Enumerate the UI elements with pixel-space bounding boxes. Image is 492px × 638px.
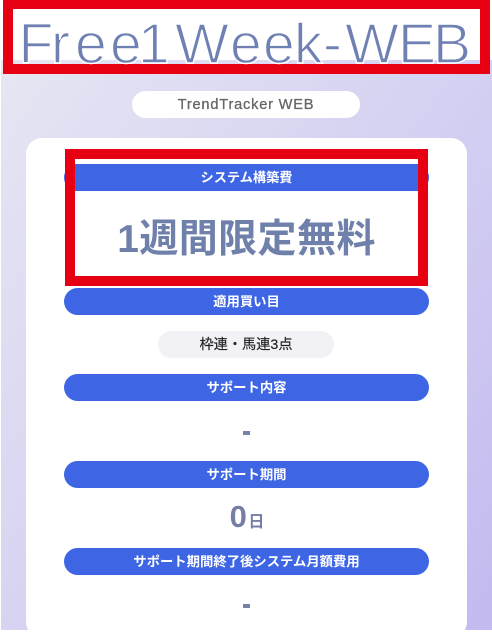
value: support content dash xyxy=(243,431,250,434)
heading: support content xyxy=(64,374,429,401)
heading: monthly fee after support xyxy=(64,548,429,575)
main white card xyxy=(26,138,467,638)
value: monthly fee dash xyxy=(243,604,250,608)
value: support period: 0日 xyxy=(230,499,264,534)
section bar: system cost (behind frame) xyxy=(64,164,429,191)
service name pill xyxy=(132,91,360,118)
heading: applicable bets: 適用買い目 xyxy=(213,294,280,309)
title frame xyxy=(3,0,490,74)
value pill: bet types: 枠連・馬連3点 xyxy=(199,337,293,353)
heading: support period xyxy=(64,461,429,488)
heading: system cost xyxy=(75,164,418,191)
service name pill: TrendTracker WEB xyxy=(178,97,314,113)
heading: support period: サポート期間 xyxy=(206,467,287,482)
value pill: bet types xyxy=(158,331,334,358)
heading: applicable bets xyxy=(64,288,429,315)
heading: system cost: システム構築費 xyxy=(201,170,292,185)
title background xyxy=(13,9,480,60)
heading: monthly fee after support: サポート期間終了後システム月額費用 xyxy=(133,554,360,569)
heading: support content: サポート内容 xyxy=(206,380,287,395)
price text: 1週間限定無料 xyxy=(117,218,376,261)
highlight frame: system cost xyxy=(65,149,428,286)
